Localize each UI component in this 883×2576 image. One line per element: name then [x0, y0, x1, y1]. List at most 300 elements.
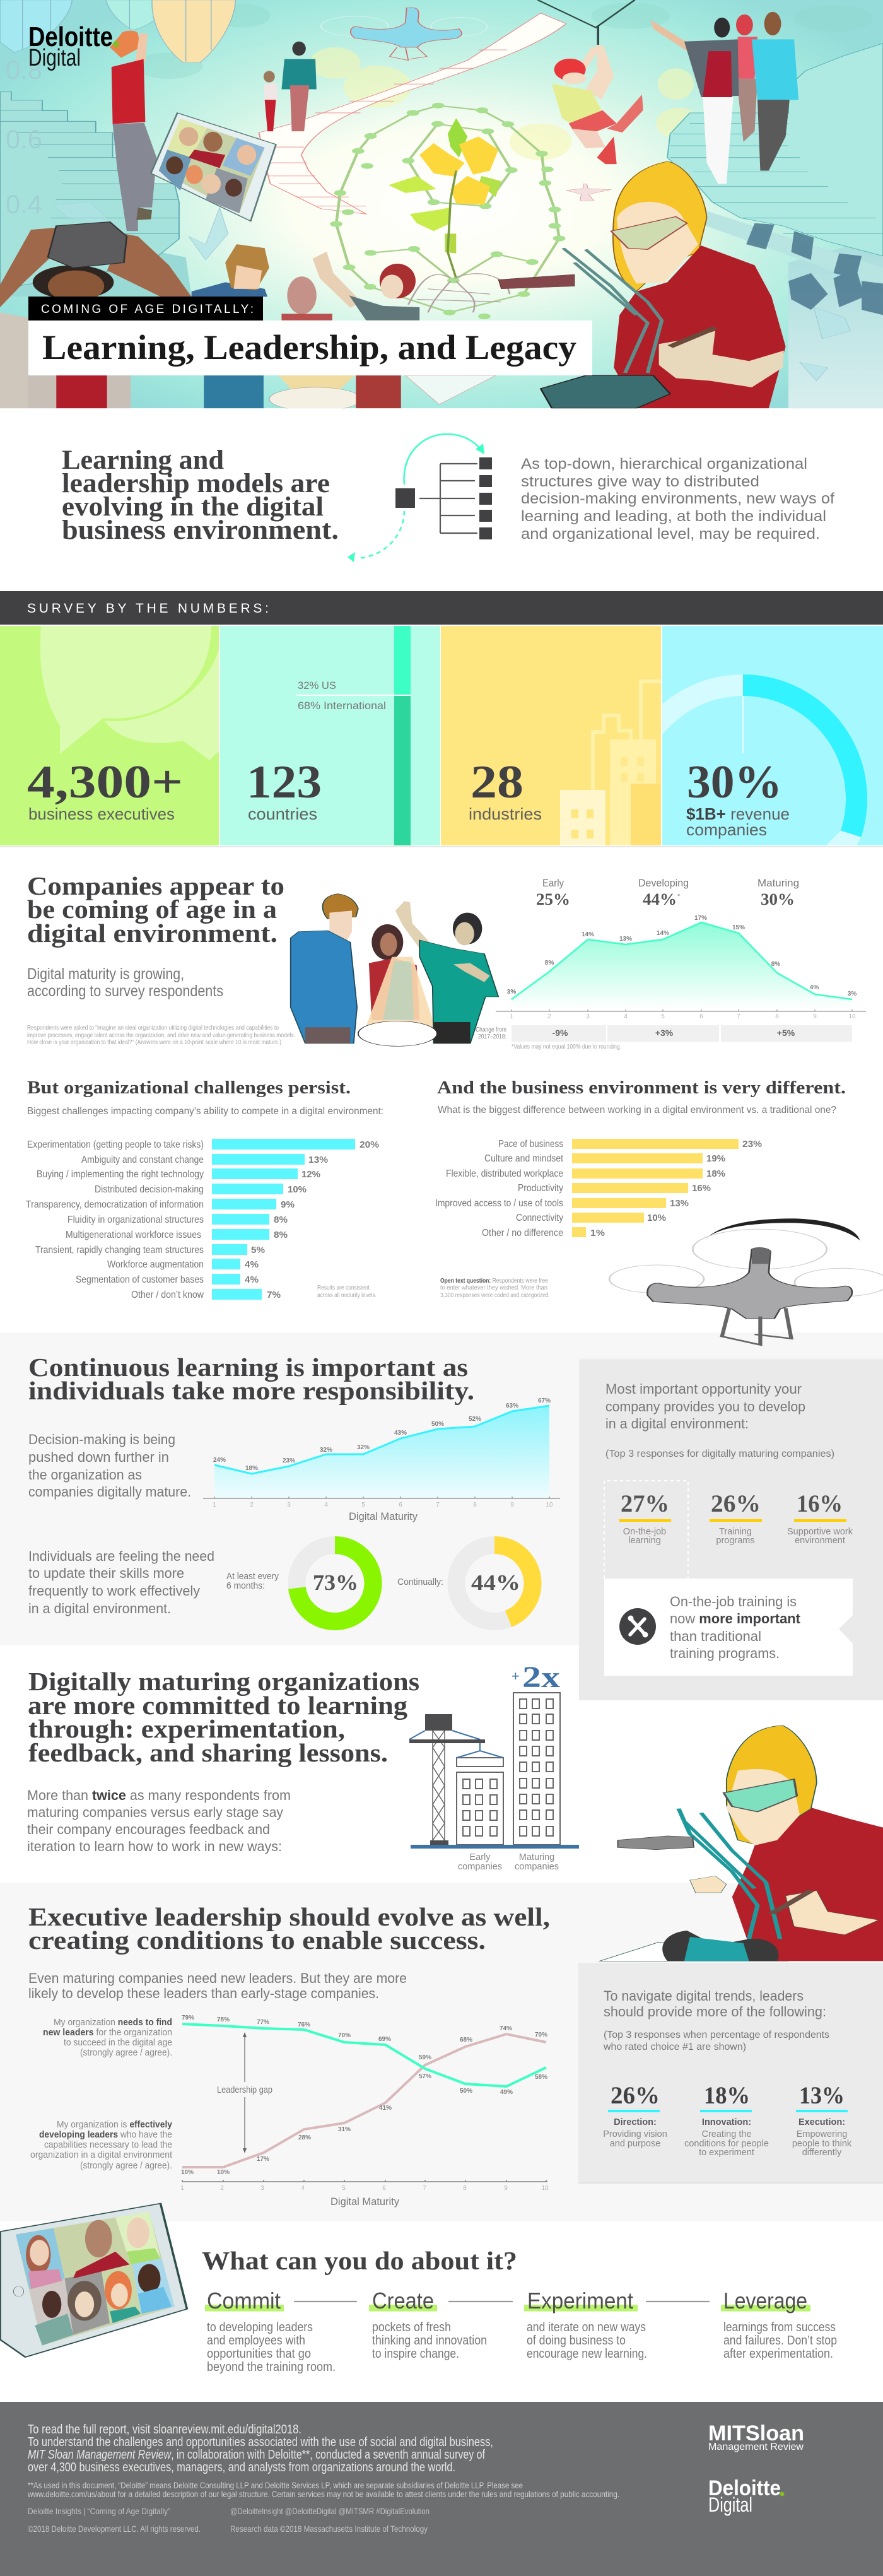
leadership gap arrow	[217, 2032, 272, 2153]
line chart: leadership gap: 76%	[298, 2021, 310, 2028]
bar chart: differences: Pace of business	[498, 1139, 563, 1150]
illustration: woman with robot	[600, 1726, 883, 1961]
heading: continuous learning	[28, 1353, 474, 1405]
area chart: digital maturity distribution: 14%	[582, 931, 594, 938]
step: experiment: encourage new learning.	[527, 2347, 647, 2361]
intro body text: structures give way to distributed	[521, 473, 759, 490]
left staircase	[0, 92, 179, 289]
text: more than twice: iteration to learn how to work in new ways:	[27, 1838, 282, 1854]
label: plus 2x: +	[512, 1668, 520, 1684]
area chart: decision making pushed down: 32%	[320, 1447, 332, 1454]
maturity stage labels: Maturing	[757, 877, 799, 889]
text: decision making: Decision-making is being	[28, 1432, 175, 1447]
bar chart: differences: 23%	[742, 1139, 762, 1150]
sidebar note: (Top 3 responses for digitally maturing companies)	[605, 1449, 834, 1459]
stat: innovation: Innovation:	[702, 2117, 751, 2127]
subheading: digital maturity: according to survey respondents	[27, 982, 223, 1000]
footer legal note: **As used in this document, “Deloitte” means Deloitte Consulting LLP and Deloitte Services LP, which are separate subsidiaries of Deloitte LLP. Please see	[28, 2481, 523, 2490]
area chart: digital maturity distribution: 8	[775, 1013, 779, 1020]
step: leverage: Leverage	[723, 2288, 807, 2314]
label: effectively developing leaders: My organization is effectively	[57, 2120, 172, 2130]
label: needs to find new leaders: to succeed in the digital age	[64, 2038, 172, 2048]
callout: on-the-job training	[604, 1579, 853, 1676]
footer credits: @DeloitteInsight @DeloitteDigital @MITSMR #DigitalEvolution	[230, 2506, 430, 2516]
area chart: decision making pushed down: 10	[546, 1502, 553, 1509]
footer panel	[0, 2402, 883, 2576]
area chart: decision making pushed down: 50%	[431, 1421, 444, 1428]
bar chart: challenges: Ambiguity and constant change	[81, 1155, 204, 1165]
stat: innovation: to experiment	[699, 2148, 754, 2158]
label: plus 2x	[512, 1661, 560, 1694]
area chart: digital maturity distribution: 3	[586, 1013, 590, 1020]
label: needs to find new leaders: My organization needs to find	[54, 2018, 172, 2028]
bar chart: challenges: Buying / implementing the right technology	[37, 1169, 204, 1180]
building labels: Early	[469, 1852, 491, 1862]
note: consistent results: across all maturity levels.	[317, 1291, 377, 1299]
title eyebrow: COMING OF AGE DIGITALLY:	[41, 303, 254, 316]
text: decision making: the organization as	[28, 1467, 142, 1483]
heading: executive leadership: creating conditions to enable success.	[28, 1926, 486, 1955]
area chart: decision making pushed down: 6	[399, 1502, 402, 1509]
bar chart: challenges: Workforce augmentation	[107, 1259, 204, 1270]
background blobs	[0, 3, 883, 408]
area chart: digital maturity distribution: 3%	[848, 991, 857, 997]
panel: organizational challenges	[26, 1078, 383, 1300]
maturity stage labels: *	[677, 893, 681, 900]
change from 2017 to 2018 strip: -9%	[553, 1028, 568, 1038]
hierarchy diagram icon	[348, 434, 492, 562]
footnote: survey question: How close is your organization to that ideal?” (Answers were on a 10-point scale where 10 is most mature.)	[27, 1038, 281, 1046]
note: open text question: Open text question: Respondents were free	[440, 1277, 548, 1285]
graphic: buildings and crane, plus 2x	[409, 1661, 579, 1872]
step: commit	[205, 2288, 336, 2374]
footer legal note	[27, 2481, 619, 2499]
line chart: leadership gap: 70%	[535, 2032, 547, 2038]
area chart: decision making pushed down: 18%	[245, 1465, 258, 1472]
bar chart: differences: Other / no difference	[482, 1228, 563, 1238]
line chart: leadership gap: 50%	[460, 2088, 472, 2095]
step: leverage: and failures. Don’t stop	[723, 2334, 837, 2348]
heading: digitally maturing organizations: through: experimentation,	[28, 1714, 345, 1743]
logo: Deloitte Digital: Deloitte	[708, 2476, 781, 2500]
heading: And the business environment is very different.	[437, 1078, 846, 1098]
maturity stage labels: 30%	[761, 890, 795, 909]
footer legal note: www.deloitte.com/us/about for a detailed description of our legal structure. Certain services may not be available to attest clients under the rules and regulations of public accounting.	[27, 2490, 619, 2499]
bar chart: differences: Culture and mindset	[484, 1153, 564, 1164]
donut chart: 73 percent	[226, 1545, 373, 1621]
stat: supportive work environment: 16%	[797, 1490, 843, 1517]
heading: companies appear: be coming of age in a	[27, 895, 277, 924]
bar chart: differences: 1%	[590, 1228, 605, 1238]
area chart: decision making pushed down: 52%	[469, 1416, 481, 1423]
text: individuals feeling the need: Individuals are feeling the need	[28, 1548, 214, 1564]
stat: direction: Providing vision	[603, 2129, 667, 2139]
heading: But organizational challenges persist.	[27, 1078, 351, 1098]
stat: direction: and purpose	[610, 2139, 660, 2149]
donut: 30 percent	[662, 674, 867, 845]
stat: direction: Direction:	[614, 2117, 657, 2127]
note: open text question: 3,300 responses were coded and categorized.	[440, 1291, 550, 1299]
intro body text	[521, 456, 834, 543]
area chart: decision making pushed down: 67%	[538, 1397, 551, 1404]
panel: industries	[441, 626, 661, 845]
panel: business executives: business executives	[28, 804, 175, 823]
heading: what can you do: What can you do about it?	[202, 2246, 517, 2275]
stat: supportive work environment	[787, 1490, 853, 1546]
Deloitte Digital logo	[28, 21, 119, 71]
crane	[409, 1714, 503, 1845]
line chart: leadership gap: 8	[463, 2185, 467, 2192]
label: effectively developing leaders: developing leaders who have the	[39, 2130, 172, 2140]
callout: on-the-job training: now more important	[670, 1611, 801, 1626]
callout: on-the-job training: On-the-job training is	[670, 1594, 797, 1609]
note: consistent results	[317, 1284, 377, 1299]
bar chart: challenges: 4%	[245, 1274, 259, 1285]
stat: on-the-job learning	[619, 1490, 671, 1546]
intro headline: leadership models are	[62, 469, 330, 498]
line chart: leadership gap: 10%	[181, 2169, 194, 2176]
text: individuals feeling the need: in a digital environment.	[28, 1601, 171, 1616]
lower band figures	[0, 312, 496, 411]
step: leverage: after experimentation.	[723, 2347, 833, 2361]
main title: Learning, Leadership, and Legacy	[42, 328, 576, 367]
stat: supportive work environment: environment	[795, 1536, 845, 1546]
bar chart: differences: 13%	[670, 1198, 689, 1209]
note: consistent results: Results are consistent	[317, 1284, 370, 1291]
step: create: thinking and innovation	[372, 2334, 487, 2348]
heading: continuous learning: individuals take more responsibility.	[28, 1376, 474, 1405]
text: more than twice: their company encourages feedback and	[27, 1821, 270, 1837]
bar chart: challenges: 12%	[301, 1169, 320, 1180]
footnote: survey question: improve processes, engage talent across the organization, and drive new and value-generating business models.	[27, 1032, 295, 1039]
panel: revenue companies: $1B+ revenue	[686, 804, 790, 823]
step: commit: beyond the training room.	[207, 2360, 336, 2374]
text: even maturing companies	[28, 1970, 407, 2001]
area chart: digital maturity distribution: 9	[813, 1013, 817, 1020]
area chart: digital maturity distribution: 10	[848, 1013, 856, 1020]
bar chart: challenges: Transient, rapidly changing team structures	[35, 1245, 204, 1256]
bar chart: challenges: 7%	[267, 1290, 281, 1300]
text: even maturing companies: Even maturing companies need new leaders. But they are more	[28, 1970, 407, 1986]
callout: on-the-job training: training programs.	[670, 1645, 780, 1661]
area chart: decision making pushed down: Digital Maturity	[349, 1510, 418, 1522]
bar chart: differences: 16%	[692, 1183, 711, 1194]
panel: revenue companies: 30%	[687, 756, 782, 808]
stat: direction: 26%	[611, 2082, 660, 2109]
step connector lines	[294, 2301, 710, 2302]
area chart: digital maturity distribution: 15%	[732, 924, 745, 931]
footer credits	[28, 2506, 430, 2534]
stat: training programs	[710, 1490, 762, 1546]
area chart: digital maturity distribution: 3%	[507, 989, 516, 996]
logo: MIT Sloan Management Review: Management Review	[708, 2442, 804, 2452]
woman with robot arm	[498, 162, 786, 408]
heading: digitally maturing organizations	[28, 1667, 419, 1767]
change from 2017 to 2018 strip: +3%	[655, 1028, 674, 1038]
icon: speech bubbles	[40, 626, 219, 760]
footer intro text: To understand the challenges and opportunities associated with the use of social and digital business,	[28, 2435, 493, 2449]
line chart: leadership gap: 58%	[535, 2074, 547, 2081]
building labels: companies	[515, 1862, 559, 1872]
sidebar heading	[604, 1988, 826, 2020]
maturity stage labels: Early	[542, 877, 564, 889]
line chart: leadership gap: 2	[220, 2185, 224, 2192]
step: create	[369, 2288, 487, 2361]
man with glasses	[192, 244, 269, 297]
pointing woman and colleague	[281, 252, 419, 321]
zip line	[538, 0, 634, 47]
change from 2017 to 2018 strip: Change from	[476, 1026, 506, 1033]
line chart: leadership gap: 57%	[419, 2073, 431, 2080]
panel: countries: 68% International	[298, 700, 386, 712]
intro body text: learning and leading, at both the individual	[521, 508, 826, 525]
zip-line boy	[552, 45, 643, 164]
line chart: leadership gap: 31%	[338, 2126, 351, 2133]
intro headline: business environment.	[62, 515, 339, 545]
heading: companies appear: Companies appear to	[27, 871, 284, 900]
bar chart: challenges: 8%	[274, 1214, 288, 1225]
step: create: Create	[372, 2288, 434, 2314]
logo: Deloitte Digital: Digital	[708, 2493, 752, 2516]
intro headline: Learning and	[62, 445, 224, 475]
change from 2017 to 2018 strip: *Values may not equal 100% due to rounding.	[512, 1043, 621, 1050]
area chart: digital maturity distribution: 17%	[694, 915, 707, 922]
step: create: to inspire change.	[372, 2347, 459, 2361]
area chart: digital maturity distribution: 2	[547, 1013, 551, 1020]
stat: innovation: conditions for people	[684, 2139, 769, 2149]
bar chart: challenges: 8%	[274, 1230, 288, 1240]
father and child	[264, 42, 317, 131]
panel: revenue companies	[662, 626, 883, 845]
heading: executive leadership: Executive leadership should evolve as well,	[28, 1902, 550, 1931]
bar chart: challenges: Distributed decision-making	[95, 1184, 204, 1195]
label: effectively developing leaders	[30, 2120, 172, 2171]
hot air balloons	[0, 0, 235, 62]
line chart: leadership gap: 10	[541, 2185, 549, 2192]
bar chart: differences: 10%	[647, 1213, 666, 1223]
footer intro text: MIT Sloan Management Review, in collaboration with Deloitte**, conducted a seventh annual survey of	[28, 2448, 485, 2462]
stat: execution: Empowering	[797, 2129, 847, 2139]
center spiral staircase	[259, 13, 566, 214]
step: experiment	[524, 2288, 647, 2361]
panel: countries: 123	[247, 756, 322, 808]
footer credits: Research data ©2018 Massachusetts Institute of Technology	[230, 2524, 428, 2534]
maturity stage labels: Developing	[638, 877, 689, 889]
panel: revenue companies: companies	[686, 820, 767, 839]
text: more than twice: maturing companies versus early stage say	[27, 1804, 283, 1820]
hero illustration	[0, 0, 883, 411]
sidebar question: in a digital environment:	[605, 1416, 749, 1432]
area chart: digital maturity distribution: 7	[737, 1013, 740, 1020]
sidebar note	[603, 2030, 829, 2052]
donut chart: 73 percent: 73%	[313, 1570, 358, 1595]
drone	[321, 8, 487, 61]
area chart: decision making pushed down: 23%	[283, 1457, 295, 1464]
line chart: leadership gap: 28%	[298, 2134, 311, 2141]
building labels: companies	[458, 1862, 502, 1872]
intro body text: As top-down, hierarchical organizational	[521, 456, 807, 473]
panel: industries: industries	[469, 804, 542, 823]
change from 2017 to 2018 strip: +5%	[777, 1028, 795, 1038]
ghost axis numbers: 0.6	[6, 124, 42, 154]
building labels: Maturing	[519, 1852, 554, 1862]
maturity stage labels: 25%	[536, 890, 570, 909]
heading: executive leadership	[28, 1902, 550, 1955]
area chart: decision making pushed down	[203, 1397, 560, 1522]
line chart: leadership gap: 3	[260, 2185, 264, 2192]
step: commit: Commit	[207, 2288, 281, 2314]
sidebar note: who rated choice #1 are shown)	[603, 2042, 746, 2052]
donut chart: 73 percent: At least every	[226, 1571, 279, 1582]
stat: on-the-job learning: 27%	[621, 1490, 669, 1517]
panel: what leaders should provide	[578, 1963, 883, 2184]
step: commit: to developing leaders	[207, 2320, 313, 2334]
icon: wrench and screwdriver	[619, 1608, 656, 1645]
step: leverage	[721, 2288, 837, 2361]
line chart: leadership gap: 79%	[182, 2014, 194, 2021]
illustration: grey drone	[609, 1218, 883, 1345]
note: open text question	[440, 1277, 550, 1299]
change from 2017 to 2018 strip	[476, 1025, 852, 1050]
note: open text question: to enter whatever they wished. More than	[440, 1284, 547, 1291]
stat: innovation: 18%	[704, 2082, 750, 2109]
text: more than twice	[27, 1787, 291, 1854]
line chart: leadership gap: 7	[423, 2185, 426, 2192]
logo: Deloitte Digital	[708, 2476, 785, 2516]
stat: training programs: 26%	[711, 1490, 761, 1517]
step: commit: and employees with	[207, 2334, 305, 2348]
bar chart: challenges: 10%	[288, 1184, 307, 1195]
subheading: digital maturity: Digital maturity is growing,	[27, 965, 184, 983]
area chart: decision making pushed down: 63%	[506, 1403, 518, 1409]
area chart: decision making pushed down: 8	[473, 1502, 477, 1509]
bar chart: differences: Connectivity	[516, 1213, 563, 1223]
bar chart: challenges: Other / don’t know	[131, 1290, 204, 1300]
line chart: leadership gap: 59%	[419, 2054, 431, 2061]
bar chart: differences: Improved access to / use of tools	[435, 1198, 563, 1209]
footnote: survey question	[27, 1024, 295, 1046]
heading: continuous learning: Continuous learning is important as	[28, 1353, 468, 1382]
sidebar question: company provides you to develop	[605, 1399, 805, 1414]
heading: companies appear	[27, 871, 284, 948]
intro body text: decision-making environments, new ways of	[521, 490, 834, 507]
bar chart: challenges: 13%	[308, 1155, 328, 1165]
area chart: decision making pushed down: 1	[213, 1502, 216, 1509]
area chart: digital maturity distribution: 6	[699, 1013, 703, 1020]
short building	[457, 1758, 503, 1845]
step: leverage: learnings from success	[723, 2320, 836, 2334]
stat: execution	[792, 2082, 852, 2158]
bar chart: challenges: Experimentation (getting people to take risks)	[27, 1139, 204, 1150]
text: individuals feeling the need: to update their skills more	[28, 1565, 184, 1581]
donut chart: 44 percent	[397, 1545, 532, 1621]
line chart: leadership gap: 74%	[500, 2025, 512, 2032]
sidebar question	[605, 1381, 805, 1432]
footnote: survey question: Respondents were asked to “imagine an ideal organization utilizing digital technologies and capabilities to	[27, 1024, 279, 1032]
panel: most important opportunity	[579, 1358, 883, 1700]
illustration: three people with hologram	[291, 894, 498, 1046]
tablet in hero	[151, 113, 276, 221]
intro headline: evolving in the digital	[62, 492, 324, 522]
survey banner	[0, 591, 883, 625]
panel: countries: countries	[248, 804, 317, 823]
text: individuals feeling the need: frequently to work effectively	[28, 1583, 200, 1599]
maturity stage labels	[536, 877, 799, 909]
area chart: decision making pushed down: 2	[250, 1502, 254, 1509]
bar chart: challenges: 20%	[360, 1139, 379, 1150]
section background: executive leadership	[0, 1883, 883, 2221]
stat: training programs: Training	[719, 1527, 752, 1537]
line chart: leadership gap: 4	[301, 2185, 305, 2192]
graduation caps and butterflies	[746, 223, 883, 315]
heading: digitally maturing organizations: Digitally maturing organizations	[28, 1667, 419, 1696]
line chart: leadership gap: 5	[342, 2185, 346, 2192]
donut chart: 73 percent: 6 months:	[226, 1580, 265, 1591]
building labels	[458, 1852, 559, 1872]
bar chart: challenges: Multigenerational workforce issues	[66, 1230, 201, 1240]
line chart: leadership gap: 69%	[378, 2036, 391, 2043]
maturity stage labels: 44%	[643, 890, 677, 909]
footer credits: Deloitte Insights | “Coming of Age Digitally”	[28, 2506, 170, 2516]
intro body text: and organizational level, may be required.	[521, 526, 820, 543]
area chart: digital maturity distribution: 4%	[810, 984, 819, 991]
ghost axis numbers: 0.4	[6, 189, 42, 219]
stat: execution: Execution:	[798, 2117, 845, 2127]
stat: on-the-job learning: learning	[628, 1536, 661, 1546]
stat: direction	[603, 2082, 667, 2149]
small drone	[566, 184, 611, 201]
area chart: decision making pushed down: 7	[436, 1502, 440, 1509]
sidebar heading: To navigate digital trends, leaders	[604, 1988, 804, 2004]
section background: continuous learning	[0, 1332, 883, 1645]
bar chart: challenges: Fluidity in organizational structures	[67, 1214, 204, 1225]
line chart: leadership gap: 78%	[217, 2016, 230, 2023]
line chart: leadership gap: 10%	[217, 2169, 230, 2176]
line chart: leadership gap: 77%	[257, 2019, 269, 2026]
icon: city skyline	[560, 681, 661, 845]
donut chart: 44 percent: 44%	[471, 1570, 520, 1595]
step: create: pockets of fresh	[372, 2320, 451, 2334]
area chart: digital maturity distribution: 5	[661, 1013, 665, 1020]
line chart: leadership gap: 70%	[338, 2032, 351, 2039]
dashed highlight frame	[604, 1481, 688, 1579]
footer intro text: To read the full report, visit sloanreview.mit.edu/digital2018.	[28, 2423, 301, 2437]
line chart: leadership gap: 41%	[379, 2105, 392, 2112]
text: decision making: companies digitally mature.	[28, 1484, 191, 1500]
bar chart: differences: 18%	[706, 1168, 725, 1179]
sidebar heading: should provide more of the following:	[604, 2004, 826, 2020]
stat: innovation	[684, 2082, 769, 2158]
bar chart: challenges: 9%	[281, 1199, 295, 1210]
area chart: decision making pushed down: 3	[287, 1502, 291, 1509]
step: experiment: Experiment	[527, 2288, 633, 2314]
label: effectively developing leaders: organization in a digital environment	[30, 2150, 172, 2160]
ghost axis numbers	[6, 55, 42, 219]
area chart: digital maturity distribution: 8%	[545, 960, 554, 967]
panel: industries: 28	[471, 756, 523, 808]
Deloitte Digital logo: Digital	[28, 45, 81, 71]
illustration: tablet with video call	[0, 2204, 187, 2357]
logo: MIT Sloan Management Review: MITSloan	[708, 2421, 804, 2445]
text: individuals feeling the need	[28, 1548, 214, 1616]
panel: countries	[220, 626, 440, 845]
line chart: leadership gap: 17%	[257, 2156, 269, 2163]
bar chart: challenges	[26, 1139, 379, 1300]
text: more than twice: More than twice as many respondents from	[27, 1787, 291, 1803]
line chart: leadership gap: 1	[180, 2185, 184, 2192]
line chart: leadership gap	[180, 2014, 549, 2208]
group on stairs	[650, 12, 798, 184]
